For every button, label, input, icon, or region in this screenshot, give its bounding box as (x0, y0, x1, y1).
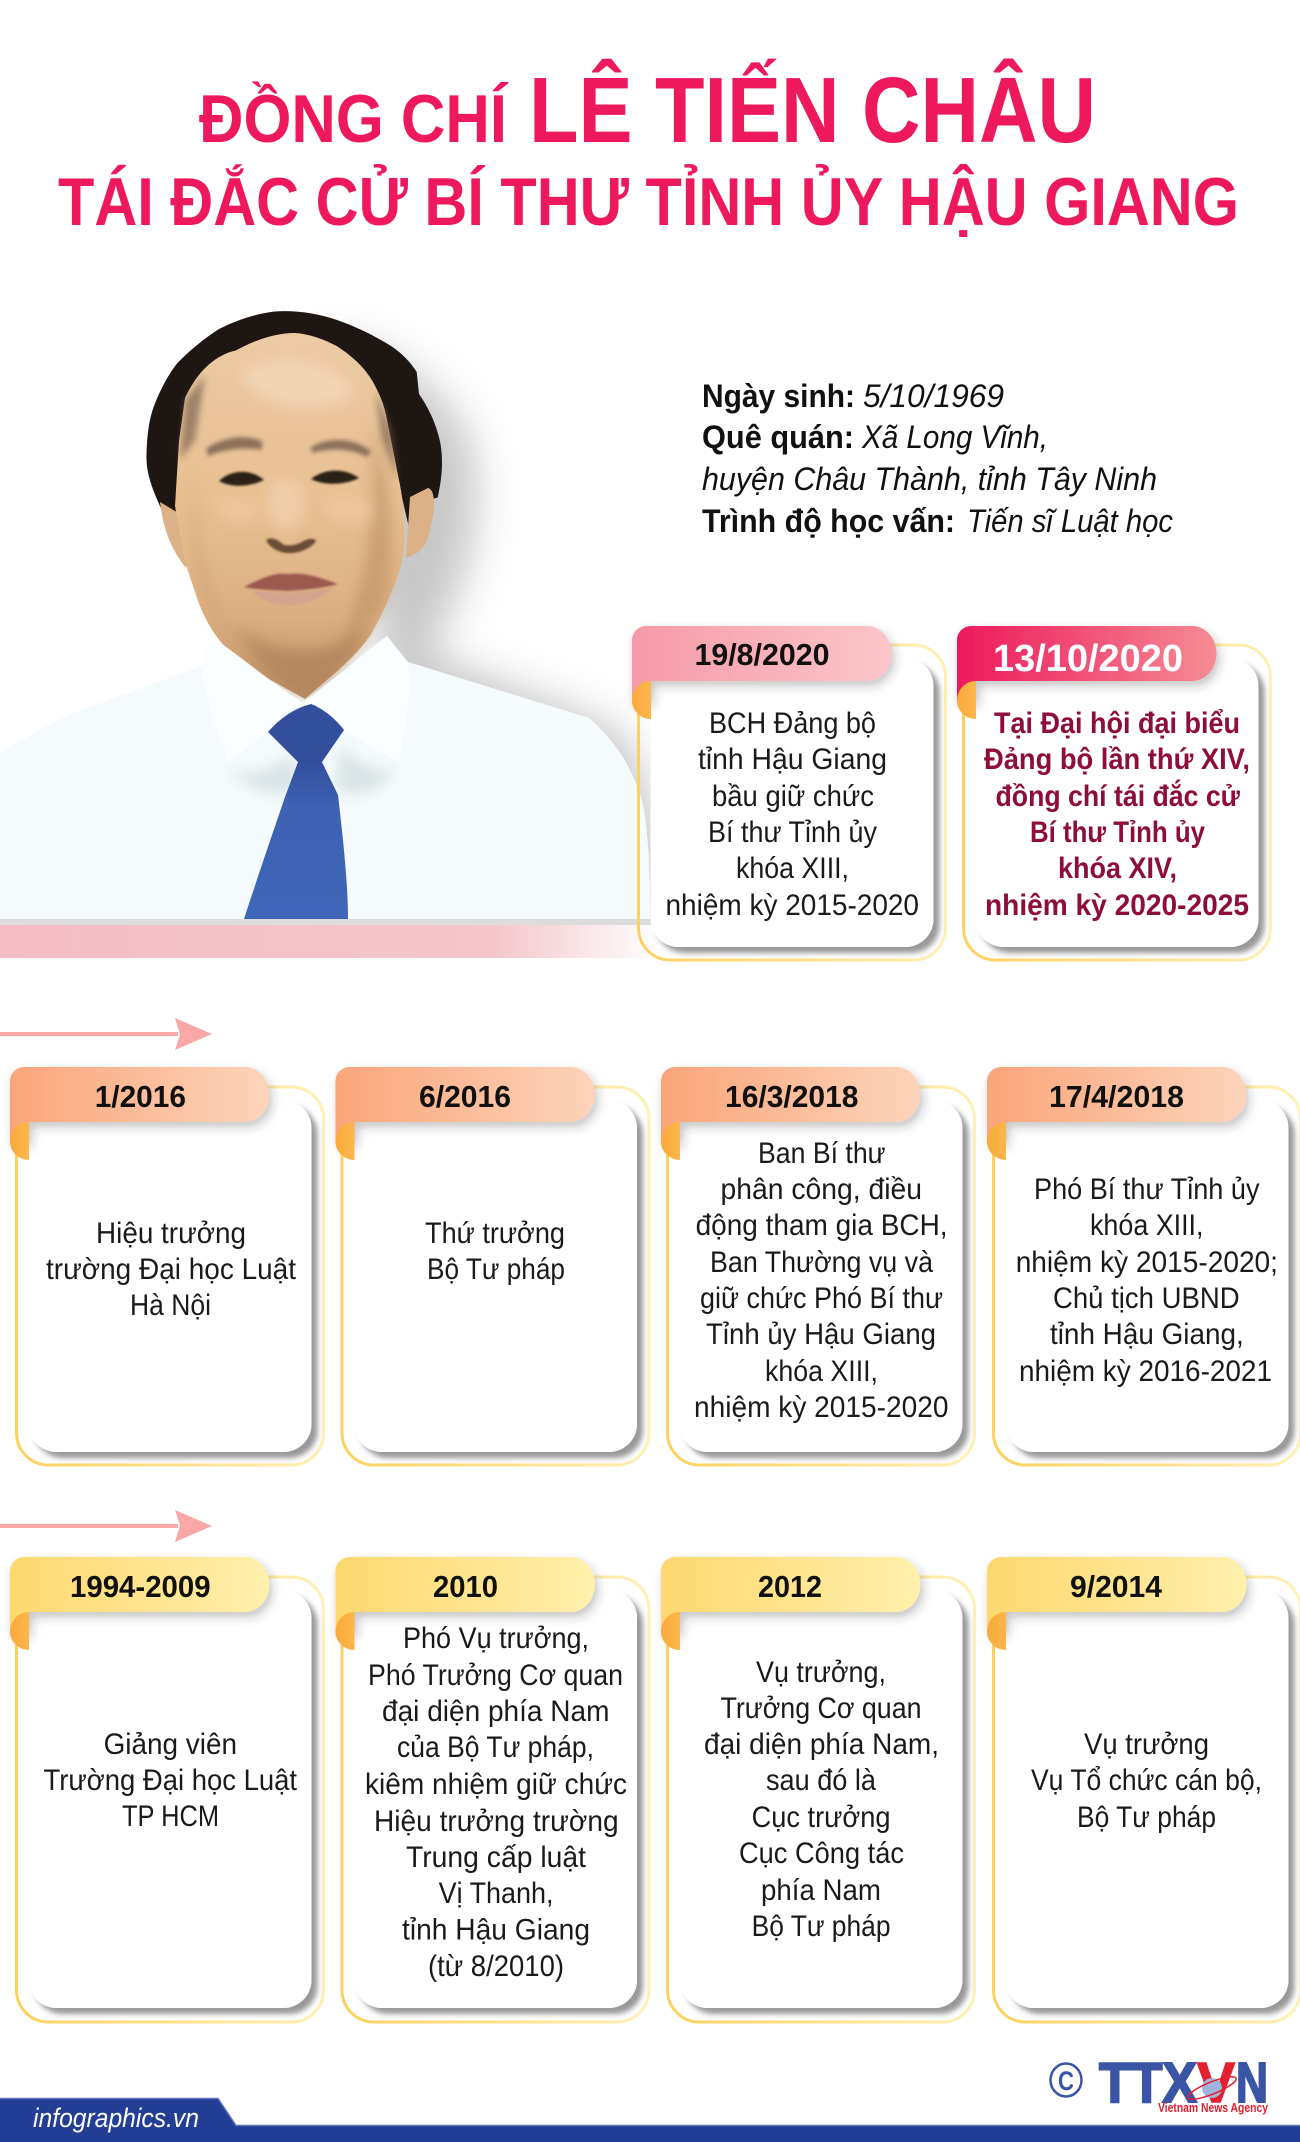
card: 2012: sau đó là (766, 1764, 876, 1797)
card: 9/2014: Vụ trưởng (1084, 1728, 1209, 1761)
card: 2010: Trung cấp luật (406, 1841, 587, 1874)
logo: TTXVN (1050, 2051, 1268, 2115)
portrait shadow (330, 340, 668, 915)
personal information: Quê quán: (702, 419, 854, 455)
logo: TTXVN: Vietnam News Agency (1158, 2101, 1268, 2115)
portrait photo band (0, 919, 670, 964)
card: 9/2014: Vụ Tổ chức cán bộ, (1031, 1764, 1262, 1797)
card: 2010: của Bộ Tư pháp, (397, 1731, 594, 1764)
card: 16/3/2018: giữ chức Phó Bí thư (700, 1282, 943, 1315)
card: 6/2016: Bộ Tư pháp (427, 1253, 565, 1286)
logo: TTXVN: N (1236, 2051, 1268, 2115)
card: 1/2016 (10, 1067, 324, 1465)
card: 2012: Cục Công tác (739, 1837, 904, 1870)
card: 1/2016: Hiệu trưởng (96, 1217, 246, 1250)
card: 1994-2009: TP HCM (122, 1800, 219, 1833)
arrow: row one (0, 1018, 212, 1050)
card: 6/2016: 6/2016 (419, 1079, 511, 1114)
card: 13/10/2020: khóa XIV, (1058, 852, 1177, 885)
card: 19/8/2020: nhiệm kỳ 2015-2020 (666, 889, 919, 922)
card: 19/8/2020: BCH Đảng bộ (709, 707, 876, 740)
card: 16/3/2018: khóa XIII, (765, 1355, 878, 1388)
nose (266, 538, 316, 553)
card: 13/10/2020: 13/10/2020 (993, 638, 1183, 680)
card: 1994-2009: Giảng viên (104, 1728, 237, 1761)
personal information: Trình độ học vấn: (702, 503, 955, 539)
card: 17/4/2018: khóa XIII, (1090, 1209, 1204, 1242)
card: 2012: Trưởng Cơ quan (720, 1692, 922, 1725)
card: 9/2014: 9/2014 (1070, 1569, 1163, 1604)
personal information: huyện Châu Thành, tỉnh Tây Ninh (702, 461, 1157, 497)
face and neck (175, 333, 404, 699)
card: 13/10/2020: Tại Đại hội đại biểu (994, 707, 1240, 740)
card: 2012: phía Nam (761, 1874, 881, 1907)
card: 13/10/2020: đồng chí tái đắc cử (996, 779, 1240, 813)
personal information: Tiến sĩ Luật học (967, 503, 1173, 539)
card: 6/2016: Thứ trưởng (425, 1217, 565, 1250)
card: 2010: (từ 8/2010) (428, 1950, 564, 1983)
arrow: row two (0, 1510, 212, 1542)
logo: TTXVN: TTX (1099, 2051, 1197, 2115)
card: 16/3/2018: phân công, điều (720, 1173, 922, 1206)
card: 19/8/2020: 19/8/2020 (694, 637, 830, 672)
card: 17/4/2018: tỉnh Hậu Giang, (1050, 1318, 1244, 1351)
card: 16/3/2018: Ban Thường vụ và (710, 1246, 933, 1279)
card: 2010: tỉnh Hậu Giang (402, 1914, 590, 1946)
copyright mark (1050, 2064, 1082, 2096)
card: 13/10/2020 (957, 626, 1270, 960)
card: 17/4/2018: 17/4/2018 (1049, 1079, 1184, 1114)
tie (244, 704, 348, 919)
copyright mark: C (1058, 2066, 1074, 2096)
card: 2010: đại diện phía Nam (382, 1695, 610, 1728)
card: 1/2016: Hà Nội (130, 1289, 211, 1322)
card: 2010: 2010 (433, 1569, 498, 1604)
shirt (0, 636, 650, 919)
globe emblem (1186, 2073, 1238, 2103)
card: 16/3/2018: 16/3/2018 (725, 1079, 858, 1114)
card: 2012: 2012 (758, 1569, 822, 1604)
card: 16/3/2018 (661, 1067, 974, 1465)
card: 17/4/2018: nhiệm kỳ 2016-2021 (1019, 1355, 1272, 1388)
card: 1994-2009 (10, 1557, 324, 2022)
eyebrows (206, 437, 371, 457)
card: 16/3/2018: Ban Bí thư (758, 1137, 886, 1170)
card: 2010 (336, 1557, 649, 2022)
card: 2012: Cục trưởng (752, 1801, 890, 1834)
shirt collar shadow (229, 745, 398, 794)
card: 19/8/2020: khóa XIII, (736, 852, 849, 885)
card: 16/3/2018: động tham gia BCH, (696, 1209, 948, 1242)
card: 19/8/2020: tỉnh Hậu Giang (698, 743, 887, 776)
title: ĐỒNG CHÍ (199, 80, 509, 157)
card: 16/3/2018: nhiệm kỳ 2015-2020 (694, 1391, 948, 1424)
card: 17/4/2018: Phó Bí thư Tỉnh ủy (1034, 1173, 1260, 1206)
footer bar (0, 2098, 1300, 2142)
card: 2012: đại diện phía Nam, (704, 1728, 939, 1761)
card: 13/10/2020: nhiệm kỳ 2020-2025 (985, 889, 1249, 922)
card: 16/3/2018: Tỉnh ủy Hậu Giang (706, 1318, 936, 1351)
face shading (191, 420, 392, 680)
card: 19/8/2020: Bí thư Tỉnh ủy (708, 816, 877, 849)
card: 1/2016: trường Đại học Luật (46, 1253, 297, 1286)
card: 2012: Bộ Tư pháp (752, 1910, 890, 1943)
card: 2010: Vị Thanh, (439, 1877, 554, 1910)
ears (160, 488, 434, 568)
card: 6/2016 (336, 1067, 649, 1465)
personal information: Xã Long Vĩnh, (861, 419, 1048, 455)
title (58, 58, 1239, 240)
card: 2012: Vụ trưởng, (756, 1656, 886, 1689)
card: 13/10/2020: Bí thư Tỉnh ủy (1030, 816, 1205, 849)
card: 19/8/2020 (632, 626, 946, 960)
personal information (702, 378, 1173, 539)
mouth (244, 574, 338, 605)
card: 1/2016: 1/2016 (95, 1079, 186, 1114)
footer site name: infographics.vn (33, 2103, 199, 2133)
card: 1994-2009: Trường Đại học Luật (44, 1764, 298, 1797)
card: 17/4/2018 (987, 1067, 1300, 1465)
eyes (219, 471, 359, 486)
card: 9/2014 (987, 1557, 1300, 2022)
card: 13/10/2020: Đảng bộ lần thứ XIV, (984, 743, 1250, 776)
portrait of Lê Tiến Châu (0, 311, 668, 919)
personal information: 5/10/1969 (863, 378, 1004, 414)
card: 19/8/2020: bầu giữ chức (712, 780, 874, 813)
hair (146, 311, 442, 536)
card: 2012 (661, 1557, 974, 2022)
collar (202, 636, 409, 762)
card: 2010: kiêm nhiệm giữ chức (365, 1768, 627, 1801)
card: 17/4/2018: nhiệm kỳ 2015-2020; (1016, 1246, 1278, 1279)
card: 2010: Phó Vụ trưởng, (403, 1622, 589, 1655)
card: 17/4/2018: Chủ tịch UBND (1053, 1282, 1240, 1315)
card: 1994-2009: 1994-2009 (70, 1569, 211, 1604)
card: 9/2014: Bộ Tư pháp (1077, 1801, 1216, 1834)
card: 2010: Phó Trưởng Cơ quan (368, 1659, 623, 1692)
personal information: Ngày sinh: (702, 378, 855, 414)
card: 2010: Hiệu trưởng trường (374, 1805, 619, 1838)
logo: TTXVN: V (1197, 2051, 1235, 2115)
title: LÊ TIẾN CHÂU (529, 58, 1096, 162)
